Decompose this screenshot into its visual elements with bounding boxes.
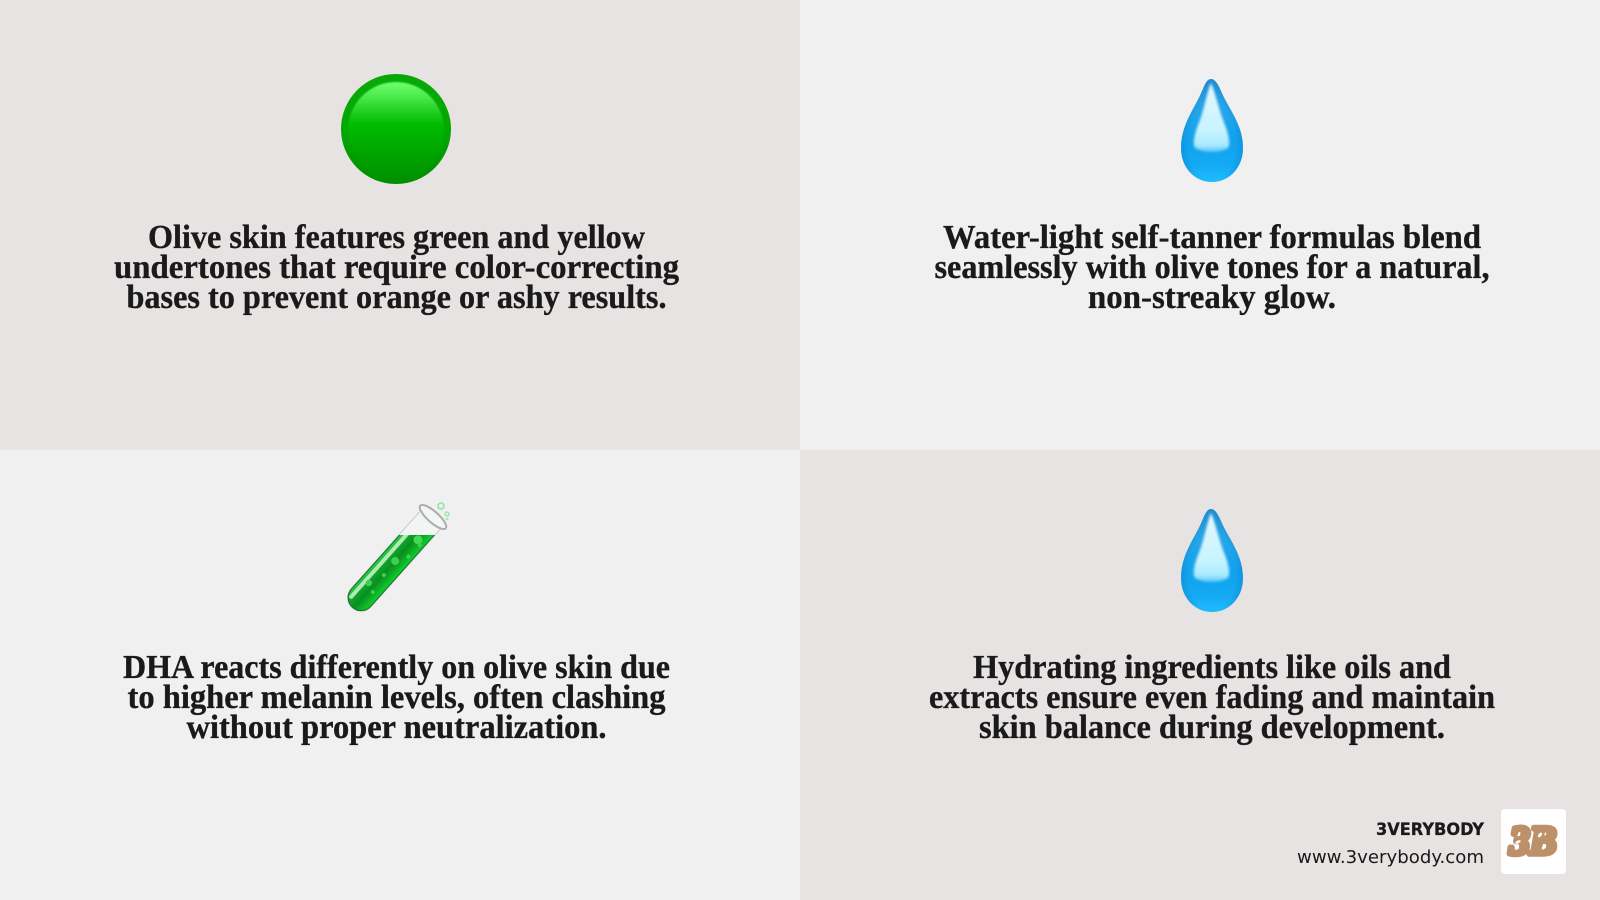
text: water-light formulas: non-streaky glow.: [1088, 279, 1336, 316]
text: hydrating ingredients: Hydrating ingredients like oils and: [973, 649, 1451, 686]
text: water-light formulas: [934, 219, 1490, 316]
icon: water drop: [1181, 79, 1243, 182]
text: water-light formulas: Water-light self-tanner formulas blend: [943, 219, 1481, 256]
icon: test tube with green liquid: [342, 502, 449, 617]
text: DHA reaction: [123, 649, 670, 746]
text: olive skin undertones: [114, 219, 679, 316]
footer: brand name and website: [1297, 820, 1485, 868]
text: DHA reaction: to higher melanin levels, often clashing: [128, 679, 666, 716]
panel: water-light formulas: [800, 0, 1600, 450]
text: olive skin undertones: Olive skin features green and yellow: [148, 219, 645, 256]
panel: hydrating ingredients: [800, 450, 1600, 900]
panel: olive skin undertones: [0, 0, 800, 450]
logo badge: 3B: [1509, 818, 1556, 863]
text: olive skin undertones: undertones that require color-correcting: [114, 249, 679, 286]
text: hydrating ingredients: extracts ensure even fading and maintain: [929, 679, 1495, 716]
text: hydrating ingredients: [929, 649, 1495, 746]
text: olive skin undertones: bases to prevent orange or ashy results.: [126, 279, 666, 316]
text: DHA reaction: DHA reacts differently on olive skin due: [123, 649, 670, 686]
logo badge: [1501, 809, 1566, 874]
footer: brand name and website: 3VERYBODY: [1376, 820, 1485, 840]
text: DHA reaction: without proper neutralization.: [186, 709, 606, 746]
footer: brand name and website: www.3verybody.com: [1297, 847, 1484, 868]
text: water-light formulas: seamlessly with olive tones for a natural,: [934, 249, 1490, 286]
panel: DHA reaction: [123, 502, 670, 746]
text: hydrating ingredients: skin balance during development.: [979, 709, 1445, 746]
icon: water drop: [1181, 509, 1243, 612]
icon: green circle: [341, 74, 451, 184]
